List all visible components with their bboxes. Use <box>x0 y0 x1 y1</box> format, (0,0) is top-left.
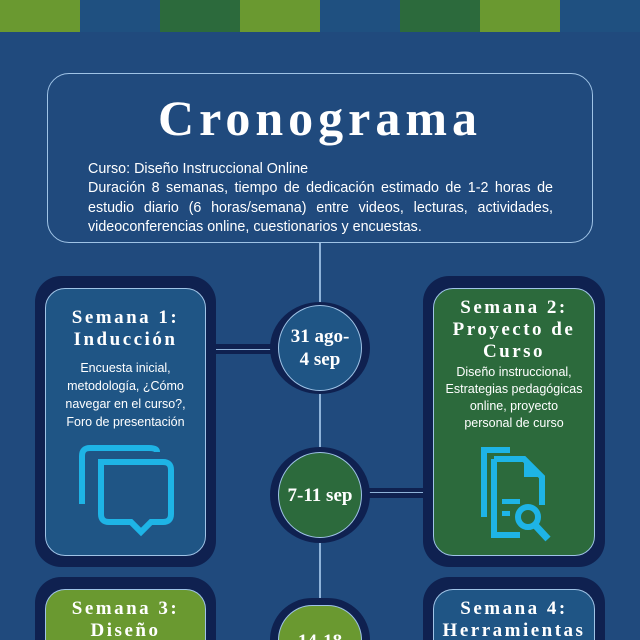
text: semana 2: personal de curso <box>464 416 564 430</box>
icon: document search <box>481 447 550 542</box>
heading: semana 2: Semana 2: <box>460 297 568 318</box>
date circle 1 <box>270 302 370 394</box>
date circle 1: 4 sep <box>300 349 340 370</box>
heading: semana 2: Proyecto de <box>453 319 575 340</box>
heading: semana 1: Inducción <box>74 329 177 350</box>
heading: semana 1: Semana 1: <box>72 307 179 328</box>
heading: semana 3: Semana 3: <box>72 598 179 619</box>
course description: Duración 8 semanas, tiempo de dedicación estimado de 1-2 horas de estudio diario (6 horas/semana) entre videos, lecturas, actividades, videoconferencias online, cuestionarios y encuestas. <box>88 180 553 235</box>
heading: semana 4: Semana 4: <box>460 598 568 619</box>
panel: semana 4 <box>423 577 605 640</box>
text: semana 1: Foro de presentación <box>66 415 185 429</box>
heading: semana 2 <box>452 297 575 362</box>
text: semana 2: online, proyecto <box>470 399 558 413</box>
text: semana 1 <box>65 361 186 429</box>
title: Cronograma <box>158 90 482 146</box>
text: semana 2 <box>446 365 582 430</box>
text: semana 2: Diseño instruccional, <box>456 365 572 379</box>
date circle 2 <box>270 447 370 543</box>
course description: Curso: Diseño Instruccional Online <box>88 161 308 177</box>
panel: semana 2 <box>423 276 605 567</box>
icon: chat bubbles <box>79 445 174 536</box>
text: semana 1: navegar en el curso?, <box>65 397 186 411</box>
heading: semana 1 <box>72 307 179 350</box>
title panel <box>47 73 593 243</box>
top color stripe <box>0 0 560 32</box>
connector: semana 2 <box>365 488 435 498</box>
connector: semana 1 <box>205 344 275 354</box>
date circle 1: 31 ago- <box>291 326 349 347</box>
heading: semana 3 <box>72 598 179 640</box>
date circle 2: 7-11 sep <box>288 484 352 506</box>
text: semana 1: Encuesta inicial, <box>80 361 171 375</box>
timeline vertical line <box>319 243 321 640</box>
heading: semana 2: Curso <box>483 341 545 362</box>
panel: semana 1 <box>35 276 216 567</box>
heading: semana 4 <box>442 598 585 640</box>
text: semana 1: metodología, ¿Cómo <box>67 379 184 393</box>
date circle 3 <box>270 598 370 640</box>
panel: semana 3 <box>35 577 216 640</box>
text: semana 2: Estrategias pedagógicas <box>446 382 582 396</box>
